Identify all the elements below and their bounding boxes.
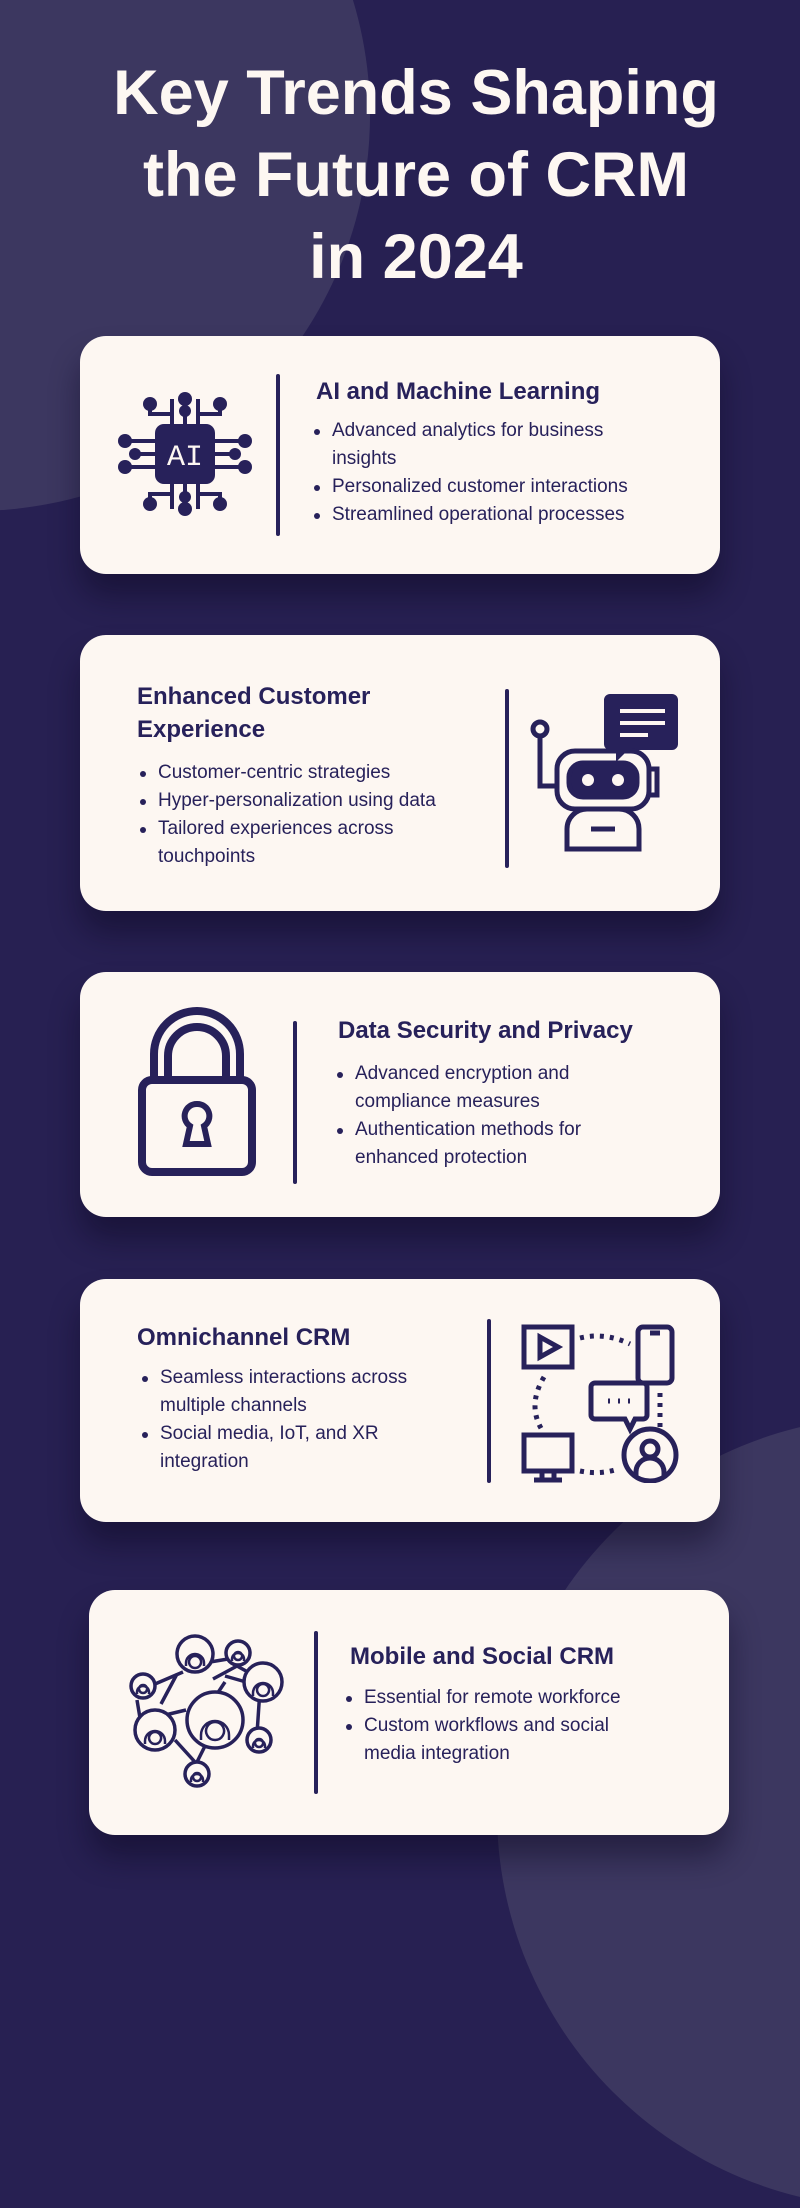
panel: Enhanced Customer Experience — [80, 635, 720, 911]
panel: AI and Machine Learning — [80, 336, 720, 574]
bullets — [346, 1687, 621, 1764]
bullets: Tailored experiences across touchpoints — [158, 818, 394, 867]
icon: padlock — [138, 1007, 256, 1176]
title — [113, 58, 719, 292]
icon: AI chip: AI — [167, 441, 203, 475]
bullets — [140, 762, 436, 867]
bullets — [337, 1063, 581, 1168]
bullets: Personalized customer interactions — [332, 476, 628, 497]
heading: Mobile and Social CRM — [350, 1643, 614, 1670]
bullets: Custom workflows and social media integration — [364, 1715, 609, 1764]
title: in 2024 — [309, 222, 523, 292]
bullets: Hyper-personalization using data — [158, 790, 436, 811]
bullets: Authentication methods for enhanced protection — [355, 1119, 581, 1168]
panel: Mobile and Social CRM — [89, 1590, 729, 1835]
panel: Data Security and Privacy — [80, 972, 720, 1217]
icon: social network — [129, 1634, 284, 1788]
bullets: Streamlined operational processes — [332, 504, 625, 525]
heading: Experience — [137, 716, 265, 743]
icon: AI chip — [118, 392, 252, 516]
panel: Omnichannel CRM — [80, 1279, 720, 1522]
bullets: Social media, IoT, and XR integration — [160, 1423, 379, 1472]
heading: Omnichannel CRM — [137, 1324, 350, 1351]
icon: omnichannel — [522, 1324, 678, 1483]
heading: Enhanced Customer — [137, 683, 370, 710]
bullets: Advanced analytics for business insights — [332, 420, 603, 469]
title: the Future of CRM — [143, 140, 689, 210]
heading: Data Security and Privacy — [338, 1017, 633, 1044]
bullets — [142, 1367, 407, 1472]
heading — [137, 683, 370, 743]
title: Key Trends Shaping — [113, 58, 719, 128]
bullets: Advanced encryption and compliance measures — [355, 1063, 569, 1112]
bullets: Essential for remote workforce — [364, 1687, 621, 1708]
bullets: Seamless interactions across multiple channels — [160, 1367, 407, 1416]
icon: chatbot robot — [530, 694, 678, 852]
bullets — [314, 420, 628, 525]
bullets: Customer-centric strategies — [158, 762, 390, 783]
heading: AI and Machine Learning — [316, 378, 600, 405]
